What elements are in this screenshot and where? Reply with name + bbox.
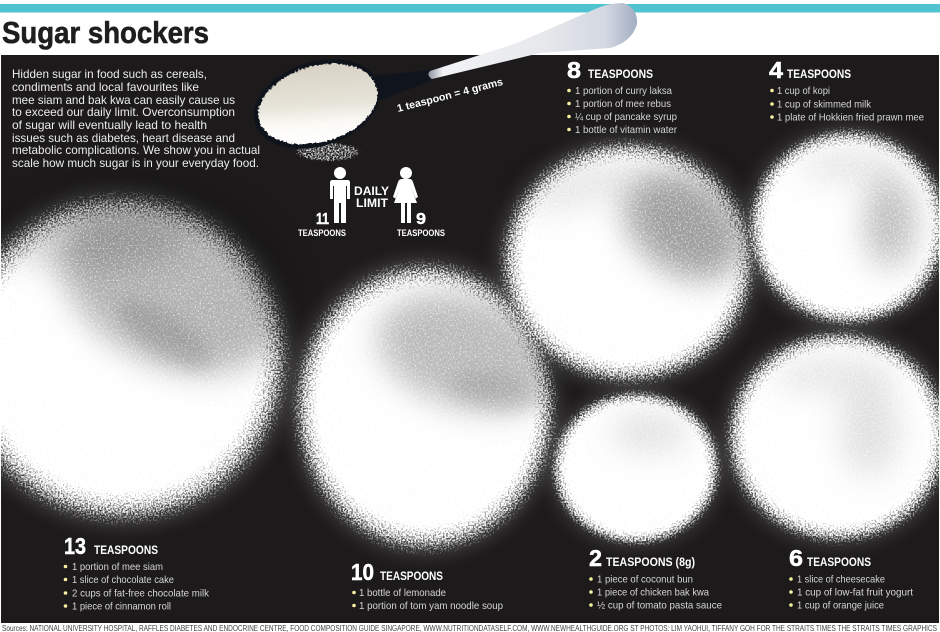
icon: man bbox=[330, 167, 350, 223]
list: 10 teaspoons: TEASPOONS bbox=[380, 569, 443, 583]
label: teaspoon equals grams: 1 teaspoon = 4 grams bbox=[396, 76, 504, 115]
list: 6 teaspoons: TEASPOONS bbox=[807, 555, 871, 569]
pile: 6 teaspoons bbox=[722, 327, 940, 547]
women value: 9 bbox=[416, 211, 426, 228]
list: 8 teaspoons: 1 bottle of vitamin water bbox=[575, 124, 677, 136]
list: 13 teaspoons bbox=[64, 533, 210, 612]
intro text block bbox=[12, 67, 260, 170]
intro text block: condiments and local favourites like bbox=[12, 80, 199, 94]
list: 8 teaspoons: TEASPOONS bbox=[588, 67, 653, 81]
daily limit label: DAILY bbox=[354, 184, 389, 198]
pile: 10 teaspoons bbox=[289, 257, 571, 557]
intro text block: issues such as diabetes, heart disease and bbox=[12, 131, 235, 145]
intro text block: of sugar will eventually lead to health bbox=[12, 118, 207, 132]
daily limit graphic bbox=[298, 167, 445, 238]
sugar piles bbox=[0, 125, 940, 557]
list: 6 teaspoons bbox=[789, 545, 913, 612]
list: 4 teaspoons bbox=[769, 57, 924, 124]
list: 13 teaspoons: 1 portion of mee siam bbox=[72, 561, 163, 573]
intro text block: Hidden sugar in food such as cereals, bbox=[12, 67, 207, 81]
title: Sugar shockers bbox=[2, 15, 209, 50]
list: 13 teaspoons: 2 cups of fat-free chocolate milk bbox=[72, 588, 210, 600]
intro text block: metabolic complications. We show you in actual bbox=[12, 143, 260, 157]
pile: 13 teaspoons bbox=[1, 186, 298, 532]
list: 4 teaspoons: 1 cup of kopi bbox=[777, 85, 830, 97]
list: 4 teaspoons: TEASPOONS bbox=[787, 67, 851, 81]
list: 8 teaspoons: ¼ cup of pancake syrup bbox=[575, 111, 677, 123]
men value: 11 bbox=[316, 211, 329, 228]
list: 10 teaspoons bbox=[351, 559, 503, 612]
intro text block: mee siam and bak kwa can easily cause us bbox=[12, 93, 235, 107]
pile: 4 teaspoons bbox=[744, 125, 940, 329]
list: 2 teaspoons: 1 piece of coconut bun bbox=[597, 574, 693, 586]
women unit: TEASPOONS bbox=[397, 228, 445, 238]
list: 4 teaspoons: 1 plate of Hokkien fried prawn mee bbox=[777, 112, 924, 124]
list: 8 teaspoons: 1 portion of mee rebus bbox=[575, 98, 671, 110]
limit label: LIMIT bbox=[356, 196, 389, 210]
list: 13 teaspoons: 13 bbox=[64, 533, 86, 559]
intro text block: scale how much sugar is in your everyday food. bbox=[12, 156, 259, 170]
icon: woman bbox=[393, 167, 418, 223]
list: 2 teaspoons: ½ cup of tomato pasta sauce bbox=[597, 600, 722, 612]
list: 8 teaspoons: 1 portion of curry laksa bbox=[575, 85, 672, 97]
list: 6 teaspoons: 6 bbox=[789, 545, 803, 571]
list: 4 teaspoons: 1 cup of skimmed milk bbox=[777, 98, 872, 110]
list: 6 teaspoons: 1 cup of orange juice bbox=[797, 600, 884, 612]
list: 13 teaspoons: TEASPOONS bbox=[94, 543, 158, 557]
intro text block: to exceed our daily limit. Overconsumption bbox=[12, 105, 235, 119]
list: 2 teaspoons bbox=[589, 545, 722, 612]
list: 2 teaspoons: 1 piece of chicken bak kwa bbox=[597, 586, 709, 598]
list: 6 teaspoons: 1 cup of low-fat fruit yogurt bbox=[797, 586, 913, 598]
list: 13 teaspoons: 1 slice of chocolate cake bbox=[72, 574, 174, 586]
list: 8 teaspoons: 8 bbox=[567, 57, 581, 83]
list: 6 teaspoons: 1 slice of cheesecake bbox=[797, 574, 885, 586]
list: 2 teaspoons: 2 bbox=[589, 545, 602, 571]
icon: spoon with sugar bbox=[242, 3, 637, 164]
list: 10 teaspoons: 1 portion of tom yam noodle soup bbox=[359, 600, 503, 612]
list: 2 teaspoons: TEASPOONS (8g) bbox=[606, 555, 695, 569]
list: 13 teaspoons: 1 piece of cinnamon roll bbox=[72, 600, 171, 612]
men unit: TEASPOONS bbox=[298, 228, 346, 238]
list: 4 teaspoons: 4 bbox=[769, 57, 783, 83]
pile: 2 teaspoons bbox=[548, 388, 724, 548]
list: 8 teaspoons bbox=[567, 57, 677, 136]
list: 10 teaspoons: 1 bottle of lemonade bbox=[359, 587, 446, 599]
pile: 8 teaspoons bbox=[496, 136, 767, 388]
list: 10 teaspoons: 10 bbox=[351, 559, 374, 585]
top teal bar bbox=[0, 4, 940, 12]
